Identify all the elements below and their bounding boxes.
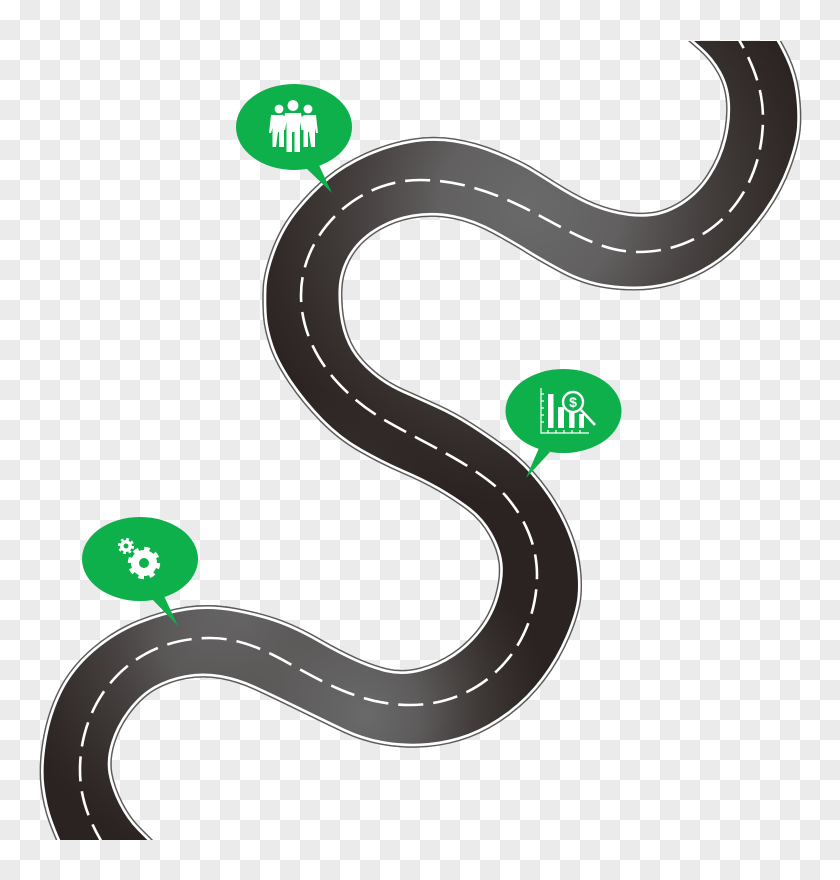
bubble shape (82, 517, 198, 626)
icon: bar chart with magnifier: $ (569, 394, 577, 410)
icon: group of people (269, 100, 318, 152)
bubble shape (236, 84, 352, 193)
speech bubble: settings (82, 517, 198, 626)
bubble shape (506, 369, 622, 478)
road surface: upper grey sheen (278, 41, 783, 460)
road surface: lower grey sheen (56, 605, 345, 782)
speech bubble: financial analysis (506, 369, 622, 478)
road centre dashed line (80, 30, 763, 855)
icon: gears (119, 539, 158, 577)
road surface: bottom bend sheen (294, 622, 520, 748)
speech bubble: team (236, 84, 352, 193)
